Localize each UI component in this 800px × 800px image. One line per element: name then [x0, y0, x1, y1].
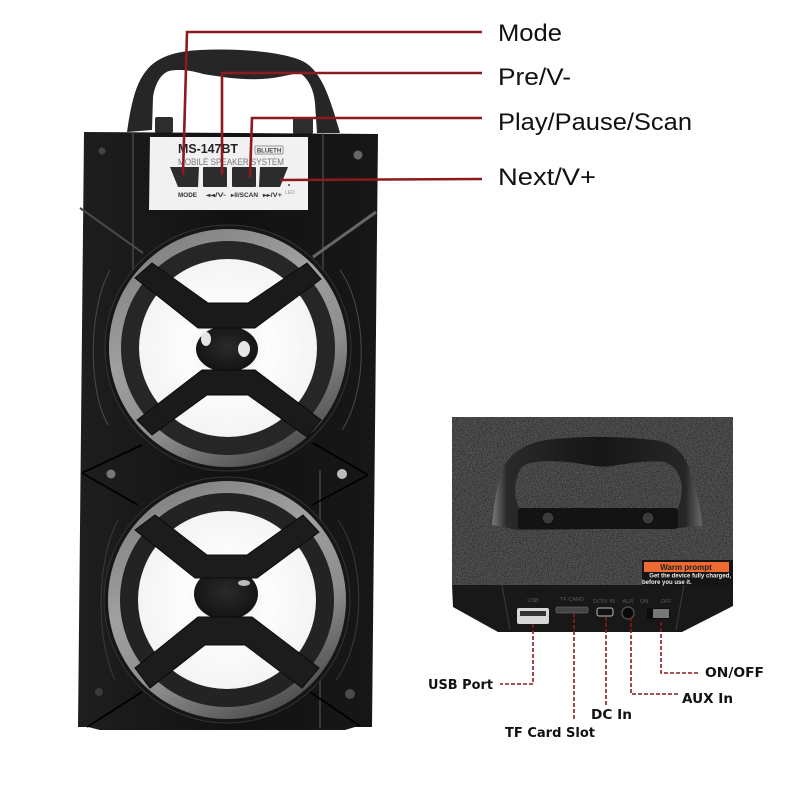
- screws: [95, 148, 362, 699]
- textured rear panel: [452, 417, 733, 585]
- grille bottom bar: [135, 617, 319, 688]
- port labels on device: OFF: [660, 599, 672, 605]
- warning sticker: before you use it.: [642, 580, 692, 586]
- button labels: ▸II/SCAN: [230, 192, 259, 199]
- port labels: TF Card Slot: [505, 726, 595, 741]
- handle screws: [542, 512, 654, 524]
- button labels: [178, 184, 295, 199]
- port labels on device: TF CARD: [560, 597, 584, 603]
- TF slot: [556, 607, 588, 613]
- control labels: [498, 20, 692, 191]
- port labels: USB Port: [428, 678, 493, 693]
- control labels: Pre/V-: [498, 64, 571, 91]
- lower driver: [104, 477, 350, 723]
- bluetooth badge: BLUETH: [257, 148, 281, 154]
- model name: MS-147BT: [178, 141, 238, 156]
- button labels: MODE: [178, 192, 197, 199]
- front speaker: [78, 49, 378, 730]
- bluetooth badge: [255, 146, 283, 154]
- control panel: [149, 137, 308, 210]
- buttons: [170, 167, 288, 187]
- subtitle: MOBILE SPEAKER SYSTEM: [178, 157, 284, 167]
- handle base bar: [518, 508, 678, 529]
- upper driver: [105, 225, 351, 471]
- grille top bar: [135, 515, 319, 578]
- rear view of speaker: [452, 417, 733, 632]
- port labels on device: USB: [527, 598, 539, 604]
- port labels: AUX In: [682, 692, 733, 707]
- port callout dashed lines: [500, 613, 700, 721]
- handle clip right: [293, 118, 313, 134]
- button labels: ◂◂/V-: [205, 192, 226, 199]
- port labels on device: AUX: [622, 599, 634, 605]
- rear handle: [492, 437, 702, 530]
- handle clip left: [155, 117, 173, 133]
- port labels: [428, 666, 764, 741]
- power switch: [647, 608, 670, 619]
- warning sticker: Get the device fully charged,: [649, 574, 731, 580]
- control labels: Play/Pause/Scan: [498, 109, 692, 136]
- control labels: Mode: [498, 20, 562, 47]
- dust cap: [194, 568, 258, 620]
- control labels: Next/V+: [498, 164, 596, 191]
- USB port: [517, 608, 549, 624]
- warning sticker: Warm prompt: [660, 563, 712, 572]
- grille top bar: [135, 263, 321, 328]
- grille bottom bar: [137, 370, 321, 437]
- speaker handle: [127, 49, 340, 133]
- port labels: DC In: [591, 708, 632, 723]
- button labels: LED: [285, 190, 295, 196]
- speaker body: [78, 132, 378, 730]
- control callout lines: [183, 32, 482, 180]
- button labels: ▸▸/V+: [262, 192, 282, 199]
- port labels on device: DC5V IN: [593, 599, 615, 605]
- warning sticker: [642, 560, 733, 586]
- body seams and diagonals: [80, 132, 376, 728]
- AUX jack: [622, 607, 634, 619]
- dust cap: [196, 326, 258, 372]
- DC port: [597, 608, 613, 616]
- bottom port strip: [452, 585, 733, 632]
- port labels: ON/OFF: [705, 666, 764, 681]
- port labels on device: ON: [640, 599, 648, 605]
- port labels on device: [527, 597, 672, 605]
